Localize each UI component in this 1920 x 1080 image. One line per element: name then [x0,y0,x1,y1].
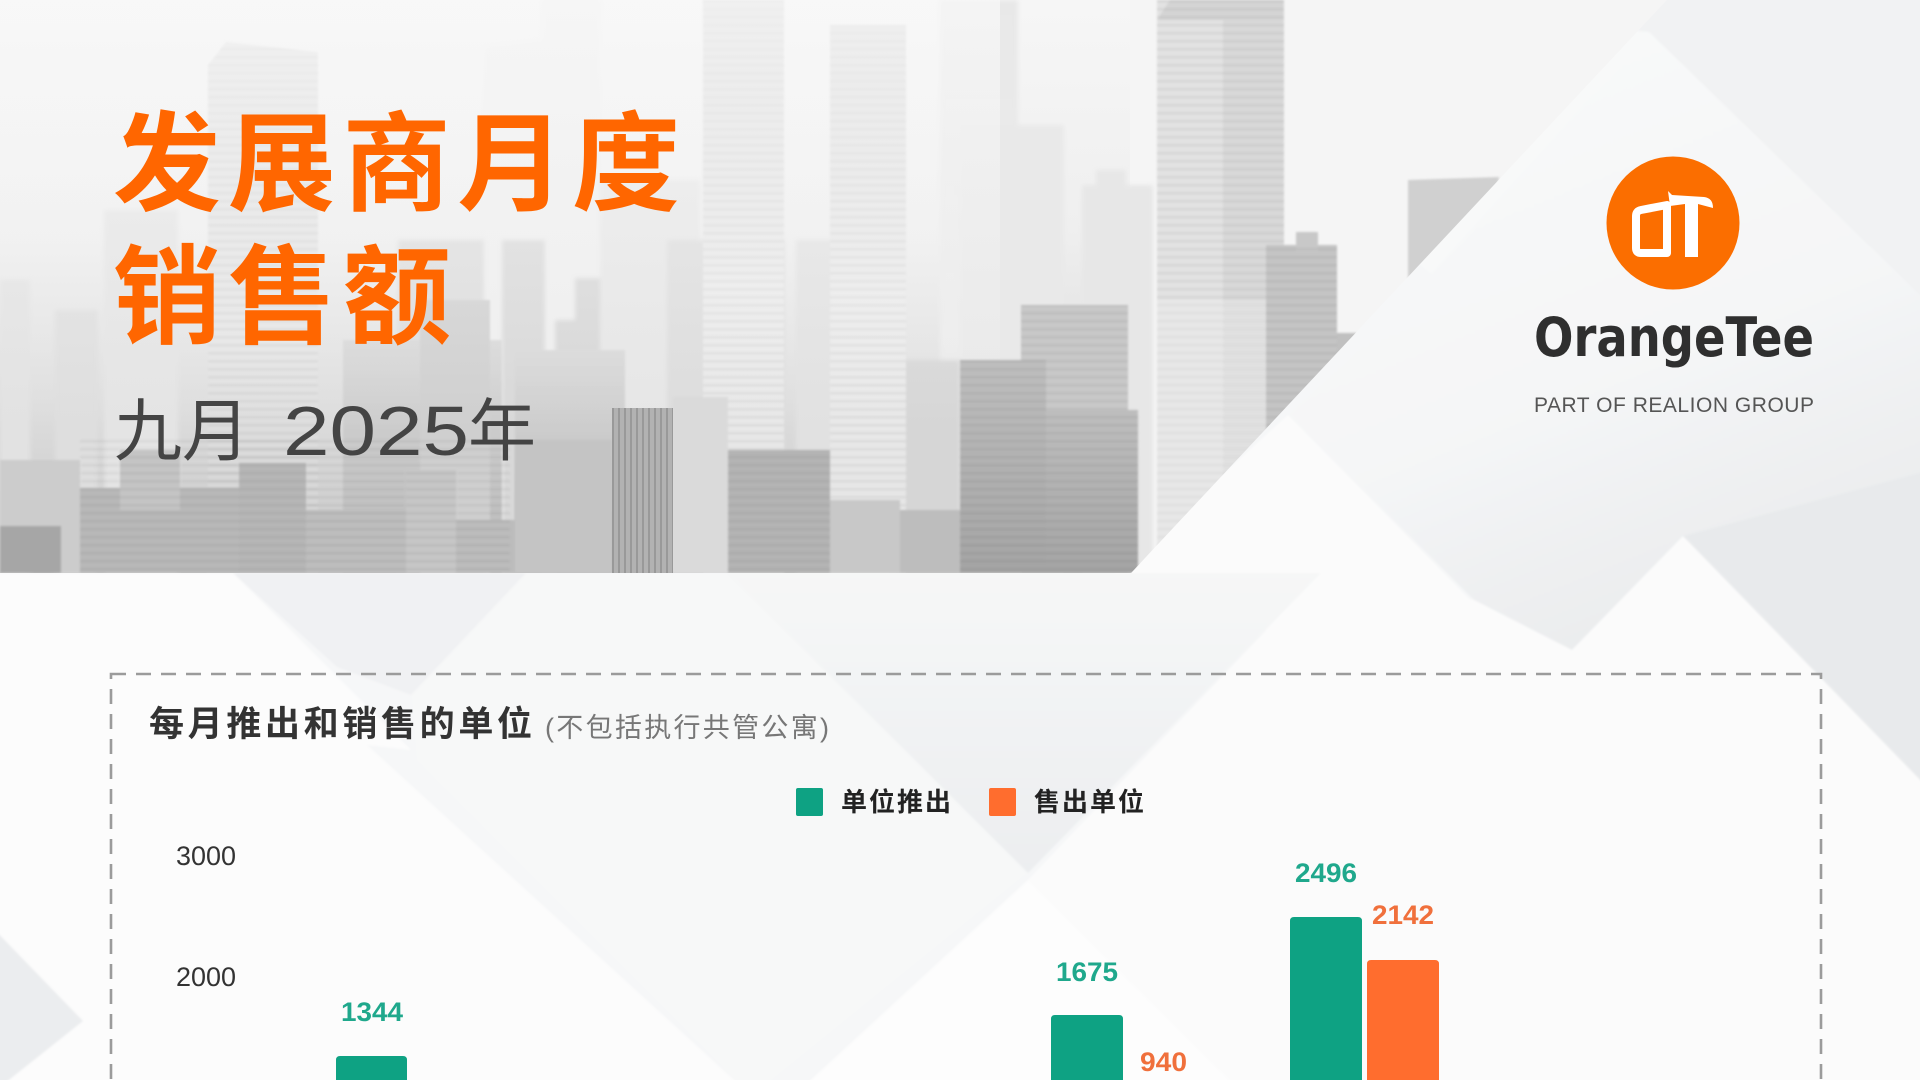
bar: launched 2496 [1290,858,1362,1080]
panel: monthly units launched and sold [111,674,1821,1080]
y axis labels: 3000 [176,841,236,871]
subtitle: month and year: 九月 [114,394,250,470]
chart heading: 每月推出和销售的单位 [149,705,532,744]
logo: OrangeTee [1534,156,1814,417]
logo icon: orange circle with OT mark [1606,156,1740,290]
title: 销售额 [113,237,451,358]
y axis labels [176,841,236,992]
subtitle: month and year [114,392,536,470]
title [113,104,680,358]
logo tagline: PART OF REALION GROUP [1534,394,1814,417]
bar chart [336,858,1439,1080]
logo wordmark: OrangeTee [1534,306,1814,369]
subtitle: month and year: 年 [468,394,536,470]
title: 发展商月度 [113,104,680,225]
legend: units sold: 售出单位 [1034,787,1144,817]
city skyline photo [0,0,1500,573]
chart heading note: (不包括执行共管公寓) [545,713,829,743]
bar: launched 1675: 1675 [1056,957,1118,987]
bar: launched 1675 [1051,957,1123,1080]
bar: sold 2142 [1367,900,1439,1080]
label: sold 940: 940 [1140,1047,1187,1077]
bar: sold 2142: 2142 [1372,900,1434,930]
bar: launched 1344 [336,997,407,1080]
legend: units launched: 单位推出 [841,787,951,817]
subtitle: month and year: 2025 [283,392,469,470]
bar: launched 2496: 2496 [1295,858,1357,888]
bar: launched 1344: 1344 [341,997,403,1027]
y axis labels: 2000 [176,962,236,992]
